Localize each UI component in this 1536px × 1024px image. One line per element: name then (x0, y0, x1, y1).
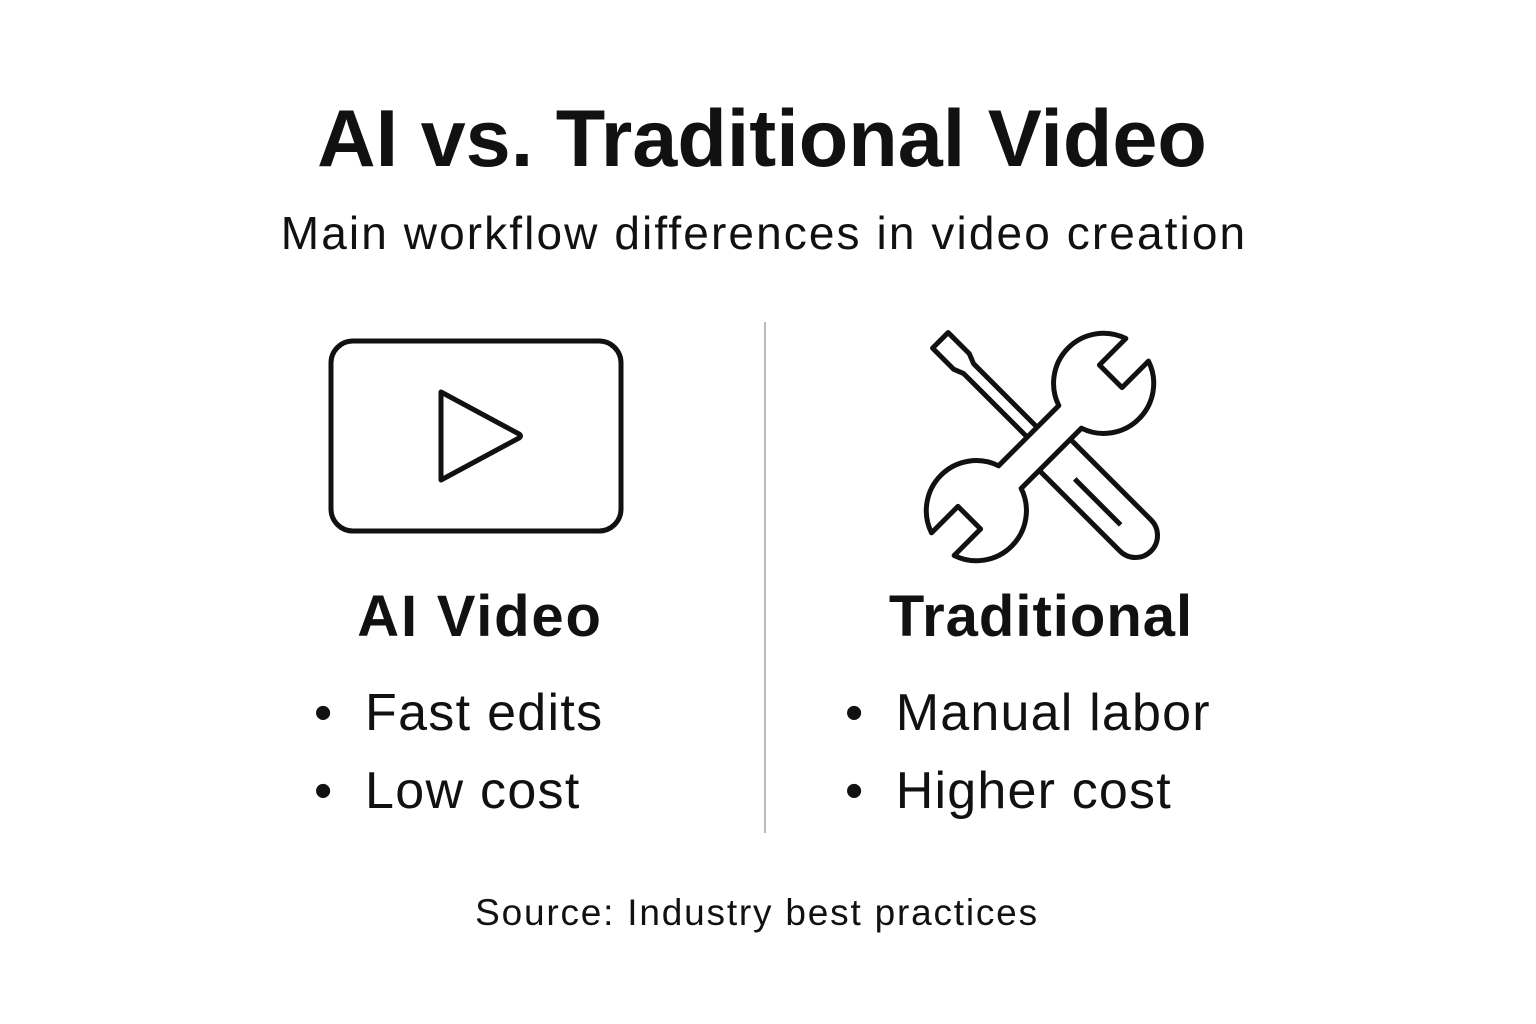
panel: traditional (845, 330, 1211, 820)
icon: video play (328, 338, 624, 534)
bullet list (845, 684, 1211, 820)
source note: Source: Industry best practices (475, 892, 1039, 933)
divider (764, 322, 766, 833)
heading: Traditional: Traditional (889, 584, 1193, 649)
title: AI vs. Traditional Video (317, 94, 1207, 184)
bullet list: • Fast edits (314, 684, 603, 742)
bullet list: • Higher cost (845, 762, 1172, 820)
heading: AI Video: AI Video (357, 584, 603, 649)
bullet list: • Low cost (314, 762, 581, 820)
bullet list: • Manual labor (845, 684, 1211, 742)
bullet list (314, 684, 603, 820)
subtitle: Main workflow differences in video creation (281, 207, 1247, 259)
panel: AI video (314, 338, 624, 820)
icon: tools (924, 330, 1160, 564)
